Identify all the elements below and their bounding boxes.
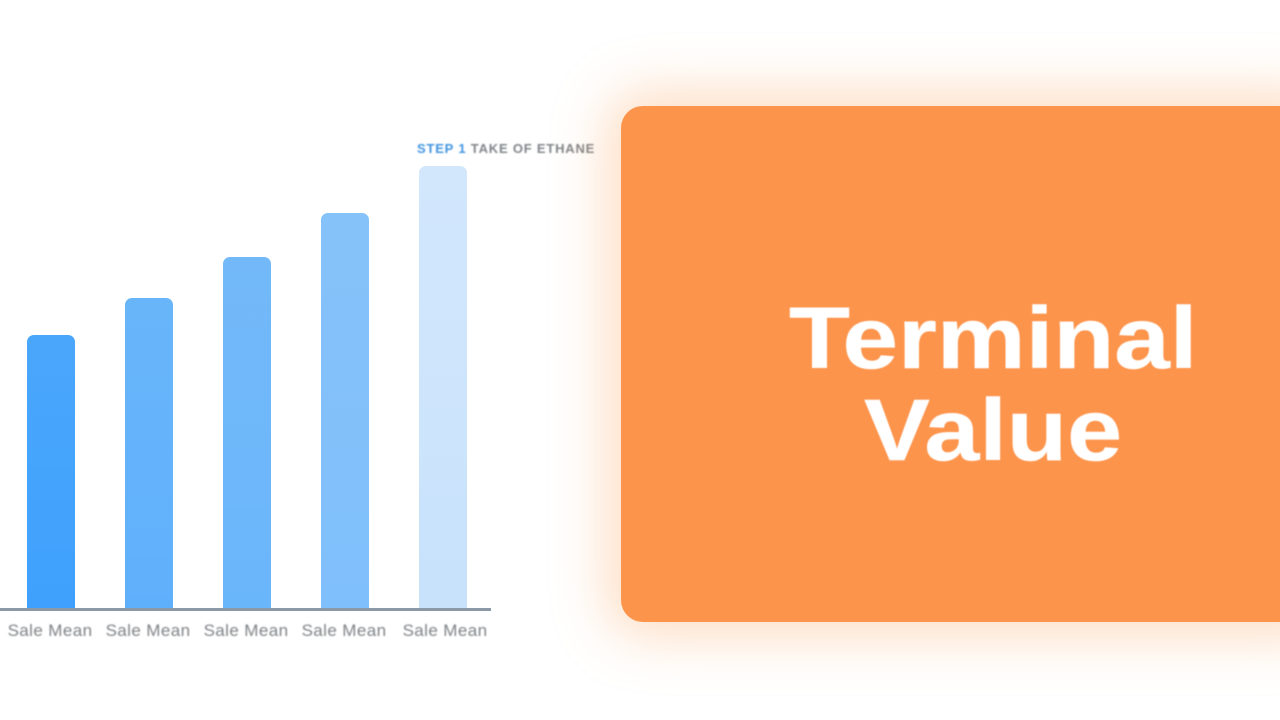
chart caption: STEP 1 TAKE OF ETHANE: [417, 141, 595, 156]
axis line: [0, 608, 491, 611]
bar 2: [125, 298, 173, 609]
axis label 2: Sale Mean: [106, 621, 190, 640]
axis label 3: Sale Mean: [204, 621, 288, 640]
bar 3: [223, 257, 271, 609]
heading: Value: Value: [864, 382, 1122, 479]
axis label 1: Sale Mean: [8, 621, 92, 640]
axis label 4: Sale Mean: [302, 621, 386, 640]
axis label 5: Sale Mean: [403, 621, 487, 640]
bar 1: [27, 335, 75, 609]
heading: Terminal: Terminal: [789, 290, 1198, 387]
bar chart: [0, 141, 595, 640]
panel: terminal value card: [621, 106, 1280, 622]
bar 5: [419, 166, 467, 609]
bar 4: [321, 213, 369, 609]
